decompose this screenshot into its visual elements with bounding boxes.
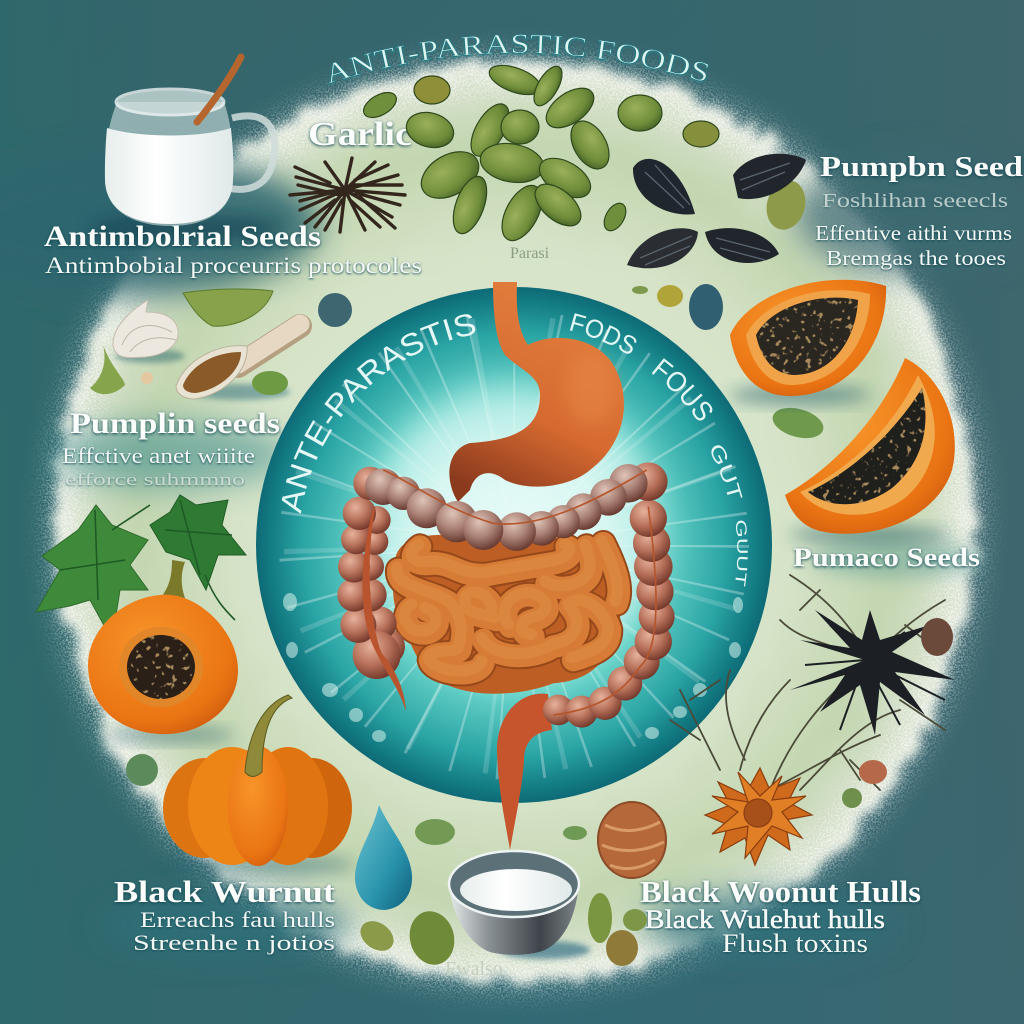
small ring glyphs	[283, 593, 743, 742]
ring text left: ANTE-PARASTIS	[282, 314, 476, 514]
body line: Effctive anet wiiite	[62, 443, 255, 468]
body line: Effentive aithi vurms	[815, 221, 1012, 245]
bottom left text: black walnut	[114, 874, 336, 955]
ring text gut: GUT	[711, 445, 742, 498]
descending colon	[543, 462, 675, 728]
title: ANTI-PARASTIC FOODS	[328, 34, 709, 85]
transverse colon	[365, 464, 648, 551]
heading: Black Wurnut	[114, 874, 336, 909]
ring text guut: GUUT	[736, 520, 748, 586]
small seed balls, right	[842, 618, 953, 808]
bowl of yogurt	[449, 851, 590, 959]
colon bands	[383, 470, 656, 715]
icon: black spiky hull	[790, 610, 955, 735]
green leaves, bottom	[355, 819, 647, 970]
heading: Pumplin seeds	[70, 407, 280, 440]
icon: dried orange flower	[705, 768, 812, 865]
icon: pumpkin	[163, 695, 355, 875]
ascending colon	[337, 467, 405, 679]
ring text fous: FOUS	[652, 358, 712, 420]
bottom right text: black walnut hulls	[640, 874, 921, 958]
icon: papaya half	[730, 280, 886, 405]
heading: Antimbolrial Seeds	[44, 220, 321, 253]
heading: Black Woonut Hulls	[640, 874, 921, 909]
left text: pumpkin seeds	[62, 407, 280, 489]
small leaf, herb and seed	[90, 293, 352, 395]
body line: Bremgas the tooes	[826, 246, 1006, 270]
heading: papaya seeds: Pumaco Seeds	[793, 543, 980, 572]
icon: papaya round	[88, 560, 238, 743]
small seeds and leaves, upper right	[632, 284, 827, 443]
icon: olive leaf	[183, 289, 273, 326]
icon: vine leaves	[36, 495, 246, 640]
icon: cardamom pods	[359, 59, 811, 247]
body line: Erreachs fau hulls	[140, 907, 335, 932]
organ: rectum	[497, 694, 552, 850]
small green seed	[126, 754, 158, 786]
water drop	[355, 805, 412, 910]
heading: garlic: Garlic	[308, 116, 412, 153]
faded line: efforce suhmmno	[65, 470, 245, 489]
organ: stomach	[449, 282, 624, 502]
icon: brown husk	[598, 802, 666, 878]
organ: large intestine	[337, 462, 675, 728]
body line: Antimbobial proceurris protocoles	[45, 253, 422, 278]
faint label: parasites: Parasi	[510, 245, 550, 262]
right side text: pumpkin seed	[815, 152, 1024, 270]
body line: Streenhe n jotios	[133, 930, 335, 955]
faint text bottom: Fwalso	[445, 958, 503, 980]
twigs	[670, 575, 945, 790]
curved ring text	[282, 313, 748, 586]
body line: Flush toxins	[722, 929, 868, 958]
left text: antimicrobial seeds	[44, 220, 422, 278]
heading: Pumpbn Seed	[820, 152, 1024, 183]
icon: garlic clove	[113, 300, 185, 363]
ring text foods: FODS	[570, 313, 636, 354]
icon: black seeds	[627, 154, 806, 268]
icon: papaya slice	[785, 358, 955, 544]
body line: Black Wulehut hulls	[645, 905, 885, 934]
icon: milk jar	[90, 57, 280, 241]
inner teal circle	[256, 287, 772, 803]
faded line: Foshlihan seeecls	[822, 190, 1008, 212]
icon: dried root	[290, 158, 405, 232]
icon: scoop with spice	[176, 324, 300, 400]
organ: small intestine	[393, 535, 626, 694]
